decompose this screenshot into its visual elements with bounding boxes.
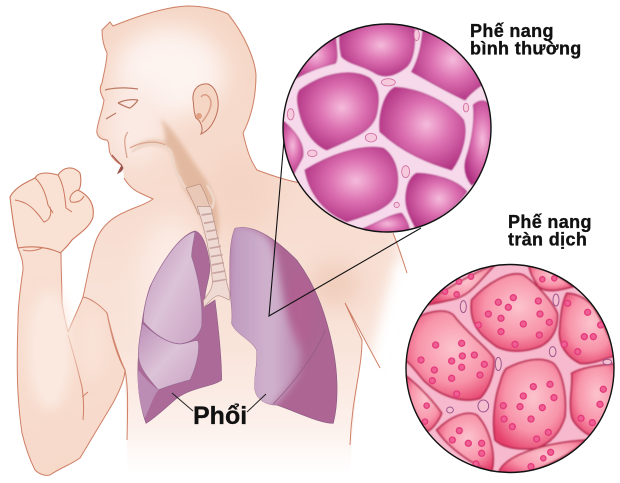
label: fluid-filled alveoli: tràn dịch [508,230,587,250]
face features [105,88,165,173]
body and head [83,6,414,483]
circle: normal alveoli [280,20,497,237]
label: normal alveoli: Phế nang [470,21,554,41]
ear [193,84,218,134]
lung: right [227,223,337,423]
label: Phổi: Phổi [193,402,247,430]
label: normal alveoli: bình thường [470,38,582,58]
body outline [83,6,407,445]
pointer lines from lung to detail [269,140,421,316]
soft shading [105,27,430,390]
circle: fluid-filled alveoli [403,263,618,477]
lungs [138,207,337,423]
fist [10,168,93,253]
lung: left [138,231,222,423]
trachea [197,207,229,307]
label: Phổi [172,393,266,430]
label: fluid-filled alveoli: Phế nang [508,212,592,232]
arm crease [23,248,125,420]
throat and airway [132,118,219,240]
forearm [17,243,125,475]
man figure [10,6,430,483]
